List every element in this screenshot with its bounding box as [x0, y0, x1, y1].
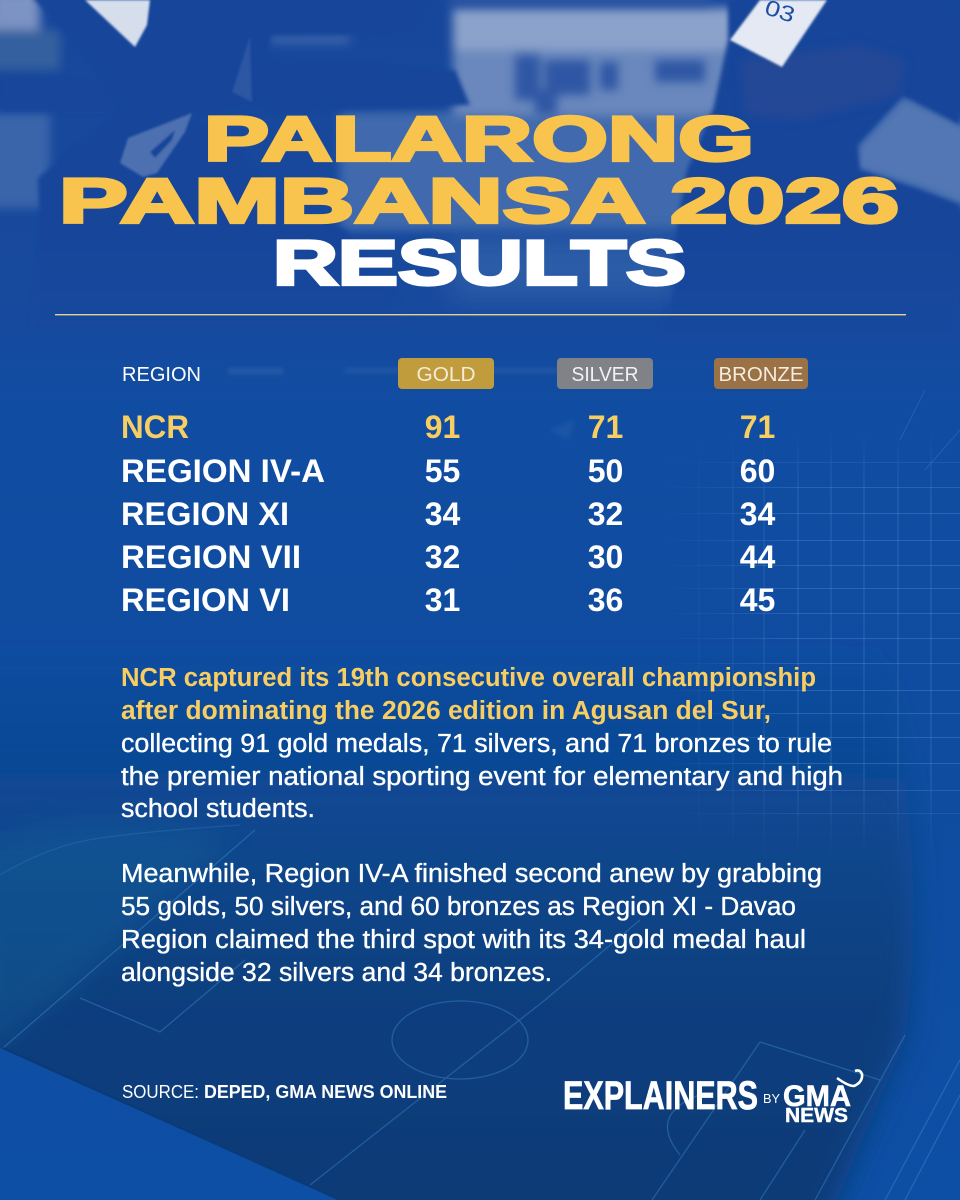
row NCR: 71	[588, 409, 623, 445]
logo: Explainers by GMA News	[563, 1070, 862, 1127]
row Region VI: 31	[425, 582, 460, 618]
row Region XI: 34	[740, 496, 776, 532]
source line: SOURCE:	[122, 1082, 199, 1102]
field	[0, 737, 960, 1200]
bronze badge: BRONZE	[718, 364, 804, 386]
row Region VI: 36	[588, 582, 623, 618]
row NCR: NCR	[121, 409, 189, 445]
paragraph 1	[121, 664, 843, 823]
table header	[122, 358, 808, 389]
grid lines	[698, 451, 960, 832]
paragraph 2: Meanwhile, Region IV-A finished second anew by grabbing	[121, 860, 822, 888]
row Region XI	[121, 496, 776, 532]
photo: spectators	[450, 0, 710, 115]
paragraph 1: after dominating the 2026 edition in Agusan del Sur,	[121, 697, 771, 725]
logo: Explainers by GMA News: EXPLAINERS	[563, 1074, 758, 1118]
title divider	[55, 314, 906, 315]
row Region XI: 32	[588, 496, 623, 532]
row Region VII	[121, 539, 776, 575]
paragraph 1: the premier national sporting event for elementary and high	[121, 763, 843, 791]
row Region XI: 34	[425, 496, 460, 532]
row NCR: 71	[740, 409, 775, 445]
row Region IV-A: REGION IV-A	[121, 453, 325, 489]
row Region VI: 45	[740, 582, 775, 618]
row NCR: 91	[425, 409, 460, 445]
heading line 1: PALARONG	[204, 104, 754, 174]
row Region VII: REGION VII	[121, 539, 301, 575]
medal table	[121, 358, 808, 618]
logo: Explainers by GMA News: BY	[763, 1091, 780, 1106]
table rows	[121, 409, 776, 618]
paragraph 2: 55 golds, 50 silvers, and 60 bronzes as Region XI - Davao	[121, 893, 796, 921]
paragraph 1: school students.	[121, 795, 315, 823]
row Region VII: 30	[588, 539, 623, 575]
row Region IV-A	[121, 453, 775, 489]
photo: right runner	[650, 0, 960, 345]
paragraph 2: alongside 32 silvers and 34 bronzes.	[121, 959, 552, 987]
gold badge	[398, 358, 494, 389]
silver badge: SILVER	[572, 364, 638, 386]
heading line 2: PAMBANSA 2026	[59, 166, 899, 236]
table header: REGION	[122, 364, 201, 386]
paragraph 1: collecting 91 gold medals, 71 silvers, and 71 bronzes to rule	[121, 730, 832, 758]
logo: Explainers by GMA News: NEWS	[785, 1105, 848, 1127]
row Region VI	[121, 582, 775, 618]
row Region VII: 32	[425, 539, 460, 575]
row Region VII: 44	[740, 539, 776, 575]
title	[59, 104, 899, 298]
paragraph 2: Region claimed the third spot with its 34-gold medal haul	[121, 926, 806, 954]
row Region VI: REGION VI	[121, 582, 290, 618]
source line: DEPED, GMA NEWS ONLINE	[204, 1082, 447, 1102]
row Region IV-A: 55	[425, 453, 460, 489]
row Region XI: REGION XI	[121, 496, 289, 532]
bronze badge	[714, 358, 808, 389]
icon: GMA swoosh	[837, 1070, 862, 1086]
row NCR	[121, 409, 775, 445]
paragraph 2	[121, 860, 822, 987]
paragraph 1: NCR captured its 19th consecutive overall championship	[121, 664, 816, 692]
heading line 3: RESULTS	[273, 228, 686, 298]
logo: Explainers by GMA News: GMA	[783, 1080, 851, 1113]
gold badge: GOLD	[416, 364, 476, 386]
photo: left runner	[0, 0, 470, 330]
row Region IV-A: 60	[740, 453, 775, 489]
silver badge	[557, 358, 653, 389]
row Region IV-A: 50	[588, 453, 623, 489]
photo: runner bibs	[85, 0, 827, 177]
